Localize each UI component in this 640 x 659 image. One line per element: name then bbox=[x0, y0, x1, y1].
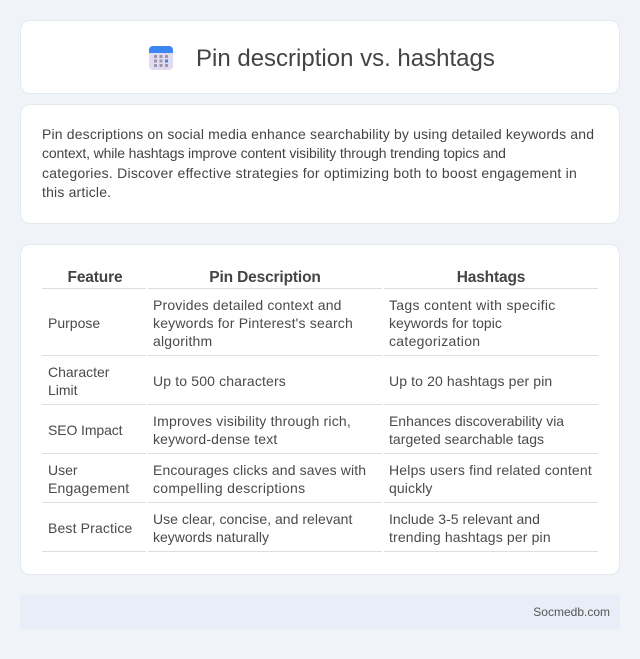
intro card bbox=[20, 104, 620, 224]
row: user engagement: Engagement bbox=[48, 480, 129, 496]
row: character limit: Character bbox=[48, 364, 109, 380]
row: user engagement bbox=[48, 462, 592, 496]
footer source: Socmedb.com bbox=[533, 605, 610, 619]
row: purpose bbox=[48, 297, 556, 349]
table header bbox=[68, 269, 525, 286]
row: best practice: Best Practice bbox=[48, 520, 132, 536]
comparison table bbox=[42, 269, 598, 552]
intro text: context, while hashtags improve content visibility through trending topics and bbox=[42, 145, 506, 161]
row: purpose: Purpose bbox=[48, 315, 100, 331]
intro text: Pin descriptions on social media enhance searchability by using detailed keywords and bbox=[42, 126, 594, 142]
row: purpose: Tags content with specific bbox=[389, 297, 556, 313]
row: character limit bbox=[48, 364, 552, 398]
row: seo impact: SEO Impact bbox=[48, 422, 122, 438]
table header: Feature bbox=[68, 269, 122, 286]
row: seo impact bbox=[48, 413, 564, 447]
row: character limit: Limit bbox=[48, 382, 78, 398]
intro text: categories. Discover effective strategies for optimizing both to boost engagement in bbox=[42, 165, 577, 181]
row: best practice: trending hashtags per pin bbox=[389, 529, 551, 545]
row: purpose: algorithm bbox=[153, 333, 212, 349]
table card bbox=[20, 244, 620, 575]
row: best practice: Include 3-5 relevant and bbox=[389, 511, 540, 527]
row: purpose: keywords for Pinterest's search bbox=[153, 315, 353, 331]
row: user engagement: Helps users find related content bbox=[389, 462, 592, 478]
row: purpose: keywords for topic bbox=[389, 315, 502, 331]
row: character limit: Up to 500 characters bbox=[153, 373, 286, 389]
row: seo impact: Enhances discoverability via bbox=[389, 413, 564, 429]
footer bar bbox=[20, 595, 620, 629]
row: user engagement: User bbox=[48, 462, 78, 478]
row: user engagement: compelling descriptions bbox=[153, 480, 305, 496]
title card bbox=[20, 20, 620, 94]
row: user engagement: Encourages clicks and saves with bbox=[153, 462, 366, 478]
row: best practice: Use clear, concise, and relevant bbox=[153, 511, 352, 527]
row: purpose: categorization bbox=[389, 333, 480, 349]
row: seo impact: keyword-dense text bbox=[153, 431, 277, 447]
row: best practice: keywords naturally bbox=[153, 529, 269, 545]
row: seo impact: Improves visibility through rich, bbox=[153, 413, 351, 429]
title: Pin description vs. hashtags bbox=[196, 45, 495, 72]
row: user engagement: quickly bbox=[389, 480, 432, 496]
intro text bbox=[42, 126, 594, 200]
table header: Hashtags bbox=[457, 269, 525, 286]
intro text: this article. bbox=[42, 184, 111, 200]
table header: Pin Description bbox=[209, 269, 321, 286]
row: purpose: Provides detailed context and bbox=[153, 297, 342, 313]
icon: calendar bbox=[149, 46, 173, 70]
row: seo impact: targeted searchable tags bbox=[389, 431, 544, 447]
row: character limit: Up to 20 hashtags per pin bbox=[389, 373, 552, 389]
